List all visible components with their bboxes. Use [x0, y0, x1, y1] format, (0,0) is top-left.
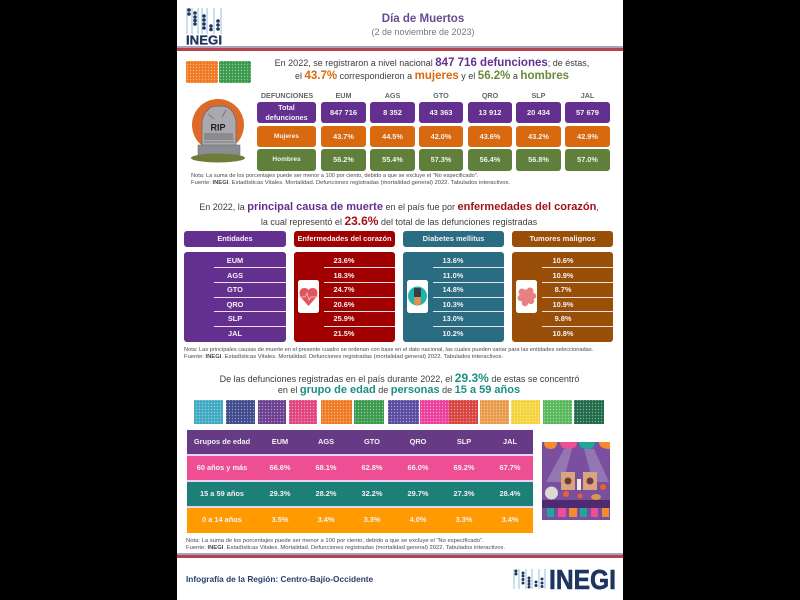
subtitle: (2 de noviembre de 2023): [371, 27, 475, 37]
header row: GTO: [364, 437, 380, 446]
title: Día de Muertos: [382, 13, 464, 25]
INEGI logo footer: INEGI: [549, 564, 616, 595]
note 3: [186, 538, 505, 550]
hombres row: [257, 149, 610, 171]
hombres row: Hombres: [272, 156, 301, 163]
mujeres row: 43.2%: [528, 132, 549, 140]
row 0 a 14 años: [187, 508, 533, 532]
footer text: Infografía de la Región: Centro-Bajío-Occidente: [186, 574, 373, 584]
row 0 a 14 años: 3.3%: [456, 515, 472, 524]
row 60 años y más: 66.6%: [270, 463, 290, 472]
row 0 a 14 años: 0 a 14 años: [202, 515, 242, 524]
header row: [187, 430, 533, 454]
row 0 a 14 años: 3.4%: [318, 515, 334, 524]
icon: papel picado banners: [194, 400, 604, 424]
column: enfermedades del corazón: 24.7%: [334, 285, 354, 294]
note 1: Fuente: INEGI. Estadísticas Vitales. Mortalidad. Defunciones registradas (mortalidad general) 2022. Tabulados interactivos.: [191, 180, 510, 186]
mujeres row: 43.7%: [333, 132, 354, 140]
row 15 a 59 años: 28.4%: [500, 489, 520, 498]
note 3: Fuente: INEGI. Estadísticas Vitales. Mortalidad. Defunciones registradas (mortalidad general) 2022. Tabulados interactivos.: [186, 544, 505, 550]
column: enfermedades del corazón: 18.3%: [334, 270, 354, 280]
note 3: Nota: La suma de los porcentajes puede ser menor a 100 por ciento, debido a que se excluye el “No especificado”.: [186, 538, 484, 544]
note 2: Nota: Las principales causas de muerte en el presente cuadro se ordenan con base en el dato nacional, las cuales pueden variar para las entidades seleccionadas.: [184, 346, 593, 352]
hombres row: 57.0%: [577, 155, 598, 164]
total row: [257, 102, 610, 123]
column: diabetes mellitus: [403, 231, 504, 342]
column: tumores malignos: 10.9%: [553, 300, 573, 308]
total row: 847 716: [330, 108, 357, 116]
note 1: [191, 172, 510, 186]
row 15 a 59 años: 15 a 59 años: [200, 489, 244, 498]
row 60 años y más: 69.2%: [454, 463, 474, 472]
row 0 a 14 años: 4.0%: [410, 515, 426, 524]
row 60 años y más: 60 años y más: [197, 463, 247, 472]
column: enfermedades del corazón: [294, 231, 395, 342]
column: entidades: Entidades: [217, 234, 253, 243]
column: tumores malignos: 9.8%: [555, 314, 571, 323]
mujeres row: Mujeres: [274, 132, 299, 140]
total row: 20 434: [527, 108, 550, 116]
column: tumores malignos: 10.9%: [553, 270, 573, 280]
header labels row 1: GTO: [433, 91, 449, 100]
table: grupos de edad: [187, 430, 533, 533]
header labels row 1: EUM: [336, 91, 351, 100]
header labels row 1: [261, 91, 594, 100]
column: enfermedades del corazón: Enfermedades del corazón: [297, 234, 392, 243]
column: tumores malignos: 10.6%: [553, 256, 573, 265]
mujeres row: 42.9%: [577, 132, 598, 140]
header labels row 1: DEFUNCIONES: [261, 91, 313, 100]
row 15 a 59 años: [187, 482, 533, 506]
row 15 a 59 años: 27.3%: [454, 489, 474, 498]
hombres row: 56.8%: [528, 155, 549, 164]
header row: JAL: [503, 437, 517, 446]
mujeres row: 43.6%: [480, 132, 500, 140]
header row: SLP: [457, 437, 471, 446]
mujeres row: 44.5%: [382, 132, 403, 140]
row 15 a 59 años: 32.2%: [362, 489, 382, 498]
row 15 a 59 años: 29.7%: [408, 489, 428, 498]
intro text: En 2022, se registraron a nivel nacional 847 716 defunciones; de éstas,: [275, 57, 589, 69]
INEGI logo top: INEGI: [186, 32, 222, 48]
row 15 a 59 años: 28.2%: [316, 489, 336, 498]
column: diabetes mellitus: 13.0%: [443, 314, 463, 323]
icon: tombstone: RIP: [210, 122, 226, 132]
row 60 años y más: 68.1%: [316, 463, 336, 472]
header labels row 1: AGS: [385, 91, 400, 100]
row 60 años y más: 62.8%: [362, 463, 382, 472]
intro text line 2: el 43.7% correspondieron a mujeres y el 56.2% a hombres: [295, 70, 569, 82]
column: entidades: QRO: [227, 300, 243, 308]
column: enfermedades del corazón: 23.6%: [334, 256, 354, 265]
note 2: [184, 346, 593, 360]
total row: Total: [278, 102, 295, 112]
total row: defunciones: [265, 112, 308, 122]
header row: QRO: [410, 437, 426, 446]
icon: glucose meter: [407, 280, 428, 313]
section 2 heading line 2: la cual representó el 23.6% del total de las defunciones registradas: [261, 214, 537, 228]
mujeres row: 42.0%: [431, 132, 451, 140]
column: diabetes mellitus: 14.8%: [443, 285, 463, 294]
column: entidades: AGS: [227, 270, 243, 280]
row 0 a 14 años: 3.4%: [502, 515, 518, 524]
total row: 57 679: [576, 108, 599, 116]
column: enfermedades del corazón: 21.5%: [334, 328, 354, 338]
note 1: Nota: La suma de los porcentajes puede ser menor a 100 por ciento, debido a que se excluye el “No especificado”.: [191, 172, 478, 178]
header labels row 1: SLP: [532, 91, 545, 100]
column: diabetes mellitus: 10.2%: [443, 328, 463, 338]
note 2: Fuente: INEGI. Estadísticas Vitales. Mortalidad. Defunciones registradas (mortalidad general) 2022. Tabulados interactivos.: [184, 354, 503, 360]
header labels row 1: QRO: [482, 91, 498, 100]
header row: Grupos de edad: [194, 437, 250, 446]
column: enfermedades del corazón: 20.6%: [334, 300, 354, 308]
column: entidades: GTO: [227, 285, 243, 294]
hombres row: 56.4%: [480, 155, 500, 164]
hombres row: 56.2%: [333, 155, 354, 164]
column: diabetes mellitus: 11.0%: [443, 270, 463, 280]
column: tumores malignos: Tumores malignos: [529, 234, 596, 243]
column: tumores malignos: [512, 231, 613, 342]
header labels row 1: JAL: [581, 91, 594, 100]
row 60 años y más: [187, 456, 533, 480]
column: tumores malignos: 10.8%: [553, 328, 573, 338]
column: entidades: SLP: [228, 314, 242, 323]
row 0 a 14 años: 3.3%: [364, 515, 380, 524]
icon: heart: [298, 280, 319, 313]
row 0 a 14 años: 3.5%: [272, 515, 288, 524]
table: defunciones: [257, 91, 610, 171]
mujeres row: [257, 126, 610, 147]
column: diabetes mellitus: 10.3%: [443, 300, 463, 308]
column: diabetes mellitus: 13.6%: [443, 256, 463, 265]
section 3 heading: De las defunciones registradas en el país durante 2022, el 29.3% de estas se concentró: [220, 371, 579, 385]
hombres row: 55.4%: [382, 155, 403, 164]
row 60 años y más: 67.7%: [500, 463, 520, 472]
column: entidades: [184, 231, 286, 342]
total row: 13 912: [479, 108, 501, 116]
header row: EUM: [272, 437, 288, 446]
hombres row: 57.3%: [431, 155, 451, 164]
column: tumores malignos: 8.7%: [555, 285, 571, 294]
header rule: [177, 46, 623, 51]
section 2 heading: En 2022, la principal causa de muerte en el país fue por enfermedades del corazón,: [199, 201, 599, 213]
column: entidades: EUM: [227, 256, 243, 265]
header row: AGS: [318, 437, 334, 446]
row 60 años y más: 66.0%: [408, 463, 428, 472]
total row: 43 363: [430, 108, 452, 116]
column: entidades: JAL: [228, 328, 242, 338]
column: diabetes mellitus: Diabetes mellitus: [423, 234, 484, 243]
footer rule: [177, 553, 623, 558]
icon: tombstone: [191, 99, 245, 162]
column: enfermedades del corazón: 25.9%: [334, 314, 354, 323]
icon: tumor: [516, 280, 537, 313]
total row: 8 352: [383, 108, 402, 116]
row 15 a 59 años: 29.3%: [270, 489, 290, 498]
INEGI logo top: [186, 8, 222, 48]
icon: papel picado pair: [186, 61, 251, 83]
section 3 heading line 2: en el grupo de edad de personas de 15 a 59 años: [278, 384, 520, 396]
